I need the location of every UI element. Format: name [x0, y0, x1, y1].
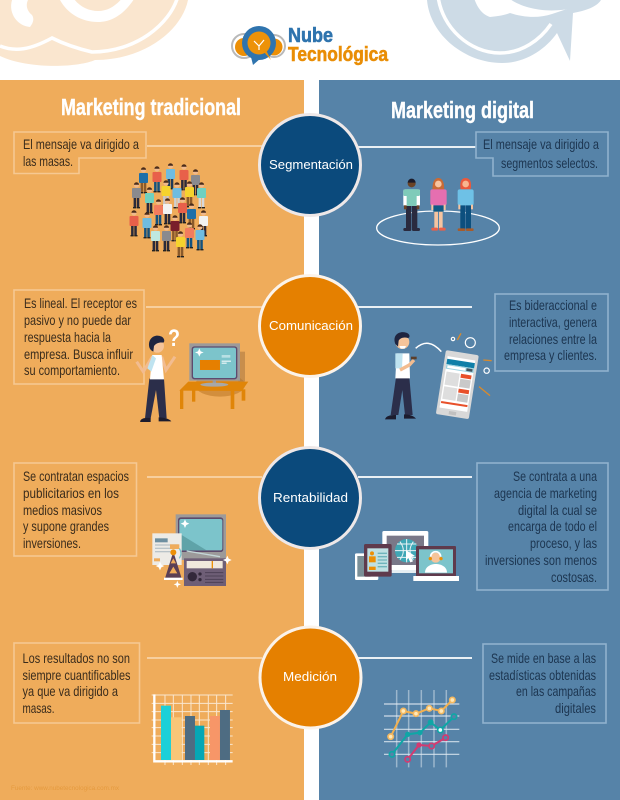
- text box: digital rentabilidad: digital la cual se: [518, 502, 597, 518]
- tablet: [364, 544, 392, 577]
- text box: tradicional comunicación: pasivo y no puede dar: [24, 312, 131, 328]
- icon: man watching television: [137, 325, 248, 422]
- connection arc: [416, 343, 441, 352]
- heading: marketing tradicional: Marketing tradicional: [61, 94, 241, 120]
- logo wordmark: Tecnológica: [288, 43, 388, 66]
- circle: Rentabilidad: Rentabilidad: [273, 490, 348, 505]
- text box: tradicional segmentación: [14, 132, 146, 174]
- text box: tradicional medición: [14, 643, 140, 723]
- radio: [184, 558, 226, 586]
- icon: three selected people in a circle: [377, 178, 499, 245]
- text box: tradicional segmentación: las masas.: [23, 153, 73, 169]
- monitor: [382, 531, 428, 573]
- text box: digital medición: en las campañas: [516, 683, 596, 699]
- phone: [355, 553, 378, 580]
- text box: digital medición: [483, 644, 606, 723]
- yellow series: [388, 697, 455, 739]
- text box: tradicional medición: ya que va dirigido a: [22, 683, 118, 699]
- circle: Comunicación: [260, 276, 360, 376]
- line chart: [384, 690, 459, 767]
- text box: digital comunicación: Es bideraccional e: [509, 297, 597, 313]
- television: [189, 343, 240, 387]
- text box: tradicional segmentación: El mensaje va dirigido a: [23, 136, 139, 152]
- axes: [154, 694, 233, 761]
- logo: Nube Tecnológica: [232, 24, 388, 66]
- radio tower: [164, 548, 183, 580]
- person 1: [403, 179, 420, 231]
- pink series: [405, 735, 448, 762]
- rod: [187, 551, 220, 557]
- connector lines: [146, 146, 476, 658]
- bar chart: [152, 694, 233, 765]
- man: [137, 336, 175, 422]
- heading: marketing digital: Marketing digital: [391, 97, 534, 123]
- chart grid: [397, 690, 446, 767]
- text box: digital rentabilidad: proceso, y las: [530, 535, 597, 551]
- text box: digital rentabilidad: [477, 463, 608, 590]
- bars: [161, 706, 230, 760]
- text box: tradicional comunicación: Es lineal. El receptor es: [24, 295, 137, 311]
- text box: tradicional rentabilidad: medios masivos: [23, 502, 102, 518]
- logo wordmark: Nube: [288, 24, 333, 47]
- text box: tradicional rentabilidad: inversiones.: [23, 535, 81, 551]
- text box: digital medición: digitales: [555, 700, 596, 716]
- circle: Segmentación: Segmentación: [269, 157, 353, 172]
- newspaper: [152, 533, 182, 565]
- smartphone: [436, 350, 479, 419]
- teal series: [389, 714, 457, 757]
- panel: marketing digital: [319, 80, 620, 800]
- text box: tradicional comunicación: empresa. Busca influir: [24, 346, 133, 362]
- icon: crowd of people: [130, 163, 208, 257]
- icon: traditional media: [152, 514, 232, 588]
- man: [385, 332, 417, 419]
- text box: tradicional rentabilidad: Se contratan espacios: [23, 468, 129, 484]
- text box: digital comunicación: relaciones entre la: [509, 331, 597, 347]
- text box: digital rentabilidad: costosas.: [551, 569, 597, 585]
- circle: Medición: Medición: [283, 669, 337, 684]
- text box: digital segmentación: [476, 132, 608, 176]
- text box: tradicional comunicación: respuesta hacia la: [24, 329, 111, 345]
- table: [179, 382, 248, 409]
- source note: Fuente: www.nubetecnologica.com.mx: [11, 786, 119, 792]
- text box: tradicional rentabilidad: [14, 463, 136, 556]
- icon: digital devices: [355, 531, 459, 581]
- logo icon: [232, 26, 285, 65]
- decorative circles and dashes: [451, 333, 492, 396]
- person 2: [430, 178, 447, 231]
- sparkles: [156, 519, 232, 588]
- background decoration: right speech bubble: [427, 0, 601, 63]
- text box: tradicional medición: masas.: [22, 700, 54, 716]
- text box: tradicional rentabilidad: y supone grandes: [23, 518, 109, 534]
- laptop: [413, 546, 459, 581]
- text box: tradicional rentabilidad: publicitarios en los: [23, 485, 119, 501]
- circle: Medición: [260, 627, 361, 728]
- television: [176, 514, 226, 560]
- television shadow: [195, 373, 245, 397]
- text box: digital comunicación: [495, 294, 608, 371]
- text box: tradicional comunicación: su comportamiento.: [24, 362, 120, 378]
- question mark: ?: [168, 325, 180, 352]
- chart grid: [152, 695, 233, 765]
- panel: marketing tradicional: [0, 80, 304, 800]
- text box: tradicional medición: Los resultados no son: [22, 650, 130, 666]
- circle: Segmentación: [260, 114, 360, 216]
- circle: Comunicación: Comunicación: [269, 318, 353, 333]
- background decoration: left cloud: [0, 0, 188, 66]
- text box: tradicional comunicación: [14, 290, 144, 384]
- icon: man using smartphone: [385, 332, 492, 419]
- text box: tradicional medición: siempre cuantificables: [22, 667, 130, 683]
- person 3: [458, 178, 474, 231]
- circle: Rentabilidad: [260, 448, 360, 548]
- logo wordmark: [288, 24, 388, 66]
